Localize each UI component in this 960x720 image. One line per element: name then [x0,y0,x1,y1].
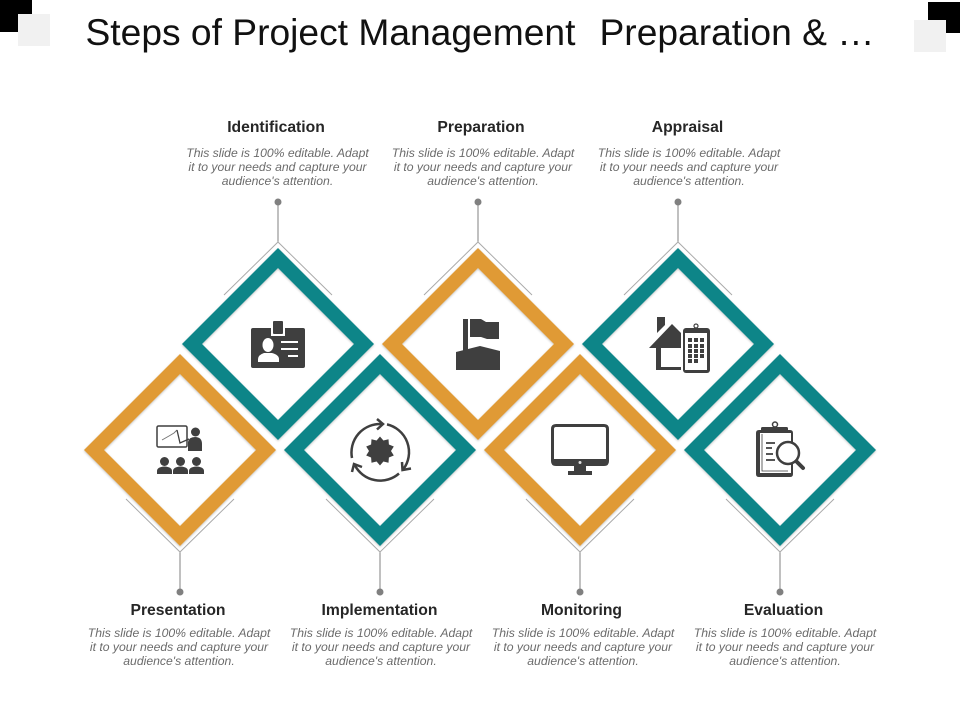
text: Evaluation: audience's attention. [729,654,841,668]
text: Appraisal [598,119,781,188]
connector: Presentation [126,499,234,596]
text: Monitoring: Monitoring [541,602,622,619]
text: Appraisal: Appraisal [652,119,723,136]
text: Monitoring [492,602,675,668]
text: Identification: Identification [227,119,325,136]
connector: Evaluation [726,499,834,596]
text: Presentation: Presentation [130,602,226,619]
text: Presentation: it to your needs and capture your [90,640,268,654]
text: Presentation [88,602,271,668]
text: Evaluation: it to your needs and capture your [696,640,874,654]
icon: flag on hill [456,319,500,370]
text: Appraisal: audience's attention. [633,174,745,188]
text: Appraisal: it to your needs and capture your [600,160,778,174]
text: Evaluation: Evaluation [744,602,823,619]
text: Evaluation: This slide is 100% editable. Adapt [694,626,876,640]
text: Implementation: audience's attention. [325,654,437,668]
corner decoration: top left [0,0,50,46]
text: Appraisal: This slide is 100% editable. Adapt [598,146,780,160]
text: Evaluation [694,602,877,668]
text: Presentation: audience's attention. [123,654,235,668]
connector: Preparation [424,198,532,295]
icon: clipboard with magnifier [756,422,803,477]
connector: Implementation [326,499,434,596]
diamond: Preparation [382,248,574,440]
text: Preparation: it to your needs and capture your [394,160,572,174]
text: Identification: it to your needs and capture your [188,160,367,174]
icon: ID badge [251,321,305,368]
diamond: Evaluation [684,354,876,546]
text: Implementation [290,602,473,668]
text: Monitoring: This slide is 100% editable. Adapt [492,626,674,640]
text: Implementation: This slide is 100% editable. Adapt [290,626,472,640]
text: Preparation [392,119,575,188]
diamond: Identification [182,248,374,440]
title: Steps of Project Management [86,11,575,53]
icon: presenter and audience [157,426,204,474]
icon: house and building [649,317,711,375]
text: Preparation: audience's attention. [427,174,539,188]
title [86,11,874,53]
diamond: Implementation [284,354,476,546]
corner decoration: top right [914,2,960,52]
text: Preparation: Preparation [437,119,525,136]
diamond: Monitoring [484,354,676,546]
text: Presentation: This slide is 100% editable. Adapt [88,626,270,640]
text: Implementation: it to your needs and capture your [292,640,470,654]
text: Identification: This slide is 100% editable. Adapt [186,146,369,160]
diamond: Presentation [84,354,276,546]
text: Identification [186,119,370,188]
text: Identification: audience's attention. [222,174,333,188]
diamond: Appraisal [582,248,774,440]
text: Implementation: Implementation [322,602,437,619]
text: Monitoring: it to your needs and capture your [494,640,672,654]
title: Preparation & … [600,11,874,53]
icon: monitor [551,424,609,475]
connector: Identification [224,198,332,295]
connector: Appraisal [624,198,732,295]
text: Preparation: This slide is 100% editable. Adapt [392,146,574,160]
text: Monitoring: audience's attention. [527,654,639,668]
connector: Monitoring [526,499,634,596]
icon: cycle with gear [351,419,411,481]
